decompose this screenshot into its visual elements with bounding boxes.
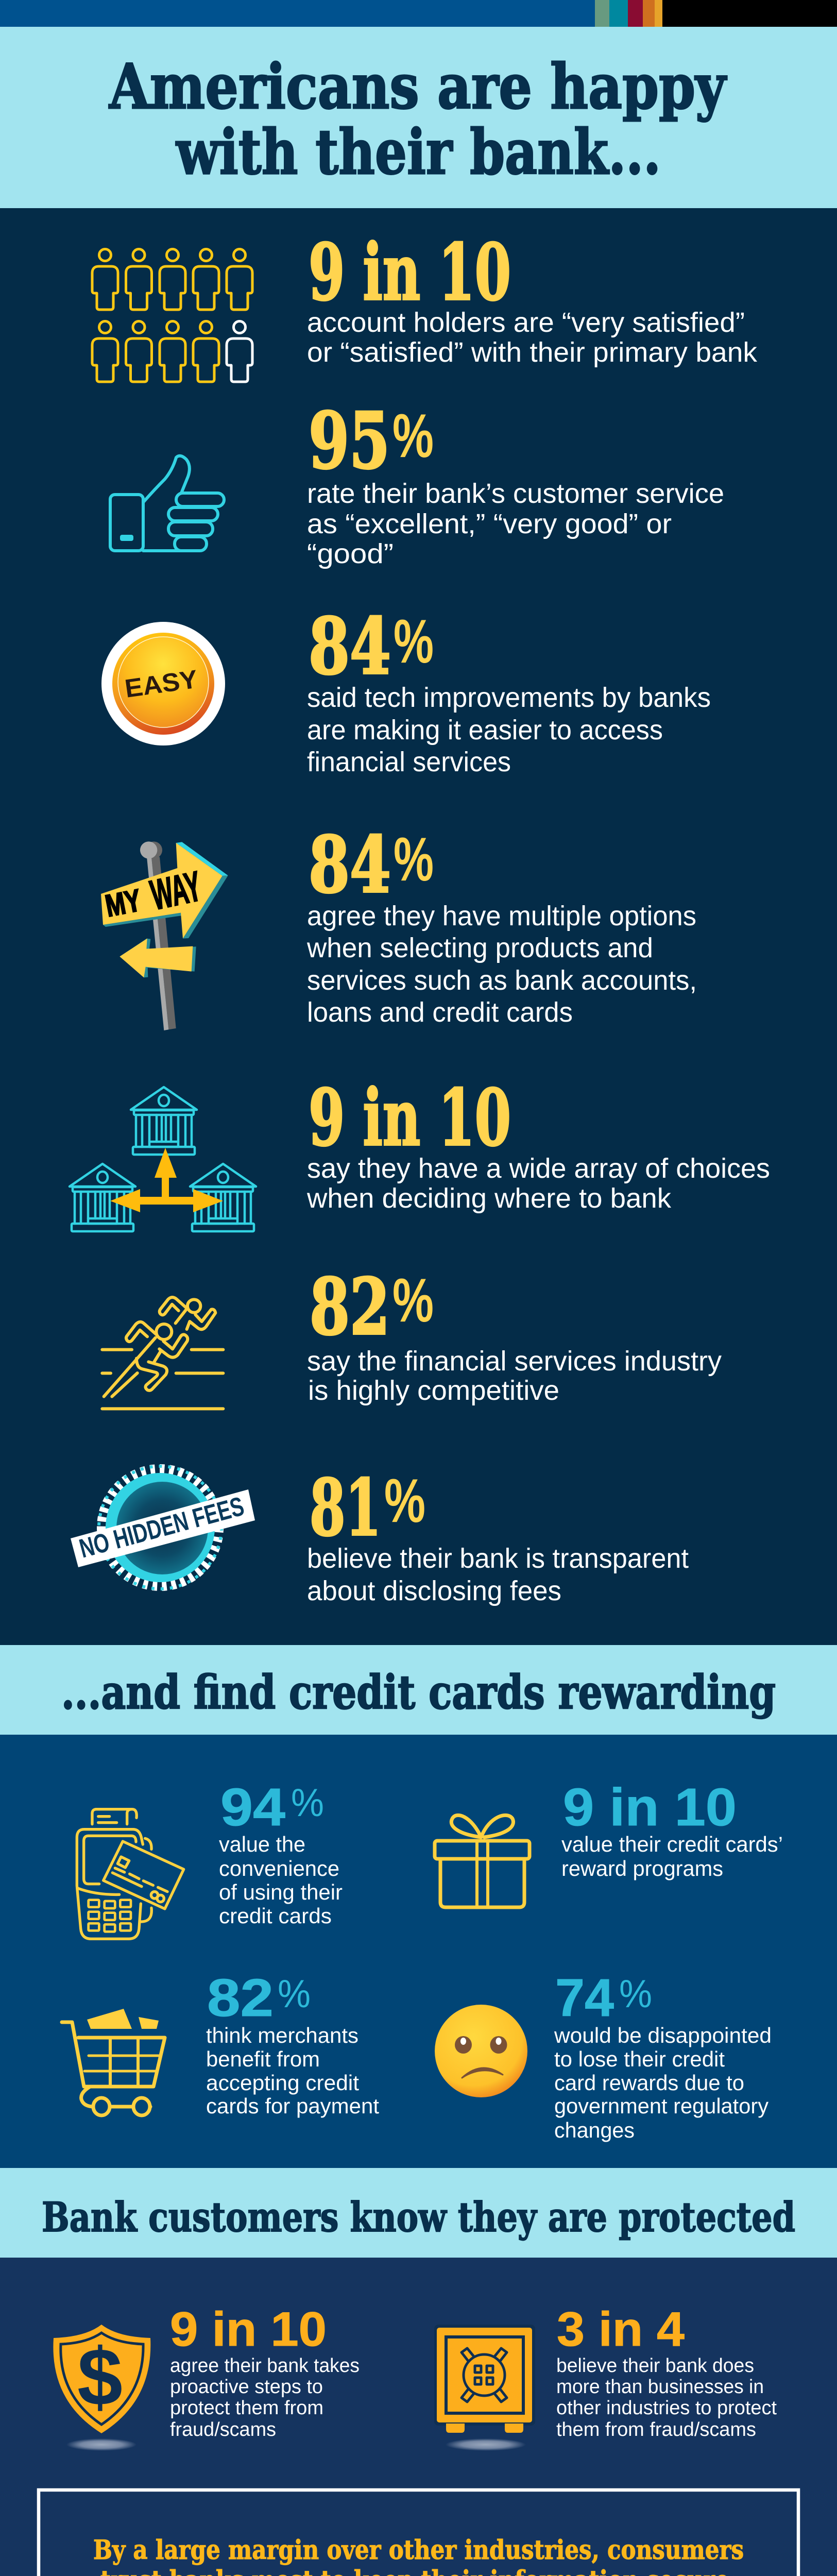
stat: 82% merchants benefit: think merchants	[206, 2023, 358, 2047]
stat: 82% merchants benefit: cards for payment	[206, 2094, 379, 2118]
stat: 74% disappointed: changes	[554, 2118, 635, 2142]
icon: three banks with arrows	[70, 1087, 256, 1231]
stat: 74% disappointed: %	[619, 1972, 652, 2016]
stat: 84% multiple options: loans and credit cards	[307, 997, 573, 1028]
stat: 82% competitive	[102, 1262, 722, 1409]
stat: 9 in 10 wide array of choices	[70, 1073, 770, 1231]
stat: 82% competitive: say the financial services industry	[307, 1346, 722, 1377]
panel: trust box	[39, 2490, 798, 2576]
stat: 9 in 10 proactive steps: protect them from	[170, 2397, 323, 2419]
stat: 84% tech improvements: are making it easier to access	[307, 715, 663, 745]
stat: 74% disappointed: to lose their credit	[554, 2047, 725, 2071]
box heading: By a large margin over other industries, consumers	[93, 2535, 744, 2566]
stat: 84% multiple options	[101, 820, 697, 1030]
icon: easy button	[101, 622, 225, 745]
stat: 74% disappointed: card rewards due to	[554, 2071, 744, 2095]
icon: no hidden fees badge: NO HIDDEN FEES	[76, 1492, 247, 1564]
stat: 9 in 10 satisfied: or “satisfied” with their primary bank	[307, 337, 758, 368]
stat: 94% convenience: %	[291, 1781, 324, 1825]
box heading	[93, 2535, 744, 2576]
panel: credit cards header	[0, 1645, 837, 1735]
stat: 3 in 4 more than other businesses: more than businesses in	[556, 2376, 764, 2398]
stat: 82% merchants benefit	[62, 1968, 379, 2118]
stat: 3 in 4 more than other businesses: them from fraud/scams	[556, 2419, 756, 2441]
title: Americans are happy	[109, 50, 727, 123]
icon: my way signpost: WAY	[147, 862, 205, 919]
icon: no hidden fees badge	[71, 1466, 255, 1589]
icon: shopping cart	[62, 2009, 165, 2115]
icon: safe	[434, 2325, 535, 2451]
stat: 3 in 4 more than other businesses: other industries to protect	[556, 2397, 777, 2419]
stat: 9 in 10 proactive steps	[53, 2302, 360, 2451]
stat: 94% convenience: value the	[219, 1832, 305, 1856]
stat: 9 in 10 wide array of choices: when deciding where to bank	[306, 1183, 672, 1214]
icon: ten people	[92, 249, 252, 382]
panel: protection header	[0, 2168, 837, 2258]
stat: 95% customer service: rate their bank’s customer service	[307, 478, 724, 509]
stat: 82% merchants benefit: benefit from	[206, 2047, 320, 2071]
stat: 84% multiple options: agree they have multiple options	[307, 901, 696, 931]
stat: 3 in 4 more than other businesses: believe their bank does	[556, 2355, 754, 2377]
stat: 95% customer service	[110, 396, 724, 569]
stat: 9 in 10 proactive steps: agree their bank takes	[170, 2355, 360, 2377]
panel: protection stats	[0, 2258, 837, 2576]
stat: 95% customer service: as “excellent,” “very good” or	[307, 509, 672, 539]
icon: runners	[102, 1297, 223, 1409]
icon: thumbs up	[110, 456, 224, 551]
stat: 81% transparent fees: believe their bank is transparent	[307, 1543, 689, 1574]
icon: gift box	[435, 1815, 529, 1907]
stat: 3 in 4 more than other businesses	[434, 2302, 777, 2451]
title	[109, 50, 727, 189]
stat: 9 in 10 reward programs: value their credit cards’	[561, 1832, 783, 1856]
stat: 84% tech improvements: 84	[309, 601, 391, 692]
panel: main header	[0, 27, 837, 208]
stat: 9 in 10 satisfied: 9 in 10	[309, 227, 511, 318]
icon: easy button: EASY	[123, 665, 199, 703]
top colour bar	[0, 0, 837, 27]
stat: 9 in 10 wide array of choices: 9 in 10	[309, 1073, 511, 1163]
icon: my way signpost: MY	[103, 883, 144, 923]
stat: 94% convenience: 94	[220, 1777, 285, 1837]
icon: sad face	[435, 2005, 527, 2097]
stat: 94% convenience: convenience	[219, 1856, 339, 1880]
stat: 9 in 10 proactive steps: 9 in 10	[170, 2302, 327, 2356]
stat: 84% tech improvements: said tech improvements by banks	[307, 682, 711, 713]
icon: card terminal	[77, 1809, 184, 1939]
panel: bank satisfaction stats	[0, 208, 837, 1645]
stat: 94% convenience: credit cards	[219, 1904, 332, 1928]
stat: 95% customer service: %	[392, 401, 434, 470]
stat: 84% multiple options: services such as bank accounts,	[307, 965, 697, 996]
icon: my way signpost	[101, 841, 228, 1030]
stat: 82% merchants benefit: 82	[207, 1968, 274, 2027]
stat: 95% customer service: “good”	[307, 538, 394, 569]
stat: 9 in 10 reward programs	[435, 1777, 783, 1907]
stat: 84% tech improvements: financial services	[307, 747, 511, 777]
stat: 74% disappointed: would be disappointed	[554, 2023, 772, 2047]
panel: credit card stats	[0, 1735, 837, 2168]
stat: 82% competitive: %	[392, 1266, 434, 1335]
stat: 9 in 10 reward programs: reward programs	[561, 1856, 723, 1880]
stat: 84% multiple options: %	[394, 825, 434, 894]
stat: 9 in 10 proactive steps: proactive steps to	[170, 2376, 323, 2398]
stat: 94% convenience: of using their	[219, 1880, 343, 1904]
stat: 82% competitive: is highly competitive	[308, 1375, 559, 1406]
title: with their bank...	[175, 116, 661, 189]
stat: 82% merchants benefit: %	[278, 1972, 311, 2016]
stat: 84% tech improvements	[101, 601, 711, 777]
stat: 9 in 10 satisfied	[92, 227, 758, 382]
stat: 95% customer service: 95	[309, 396, 390, 486]
stat: 9 in 10 proactive steps: fraud/scams	[170, 2419, 276, 2441]
icon: dollar shield: $	[77, 2332, 123, 2422]
icon: dollar shield	[53, 2325, 150, 2451]
stat: 84% multiple options: 84	[309, 820, 391, 910]
stat: 74% disappointed: 74	[555, 1968, 614, 2027]
stat: 84% tech improvements: %	[394, 607, 434, 676]
stat: 9 in 10 reward programs: 9 in 10	[563, 1777, 737, 1837]
stat: 81% transparent fees: %	[384, 1466, 425, 1535]
stat: 82% merchants benefit: accepting credit	[206, 2071, 359, 2095]
stat: 94% convenience	[77, 1777, 343, 1939]
stat: 74% disappointed	[435, 1968, 772, 2142]
stat: 81% transparent fees: 81	[310, 1463, 381, 1553]
stat: 3 in 4 more than other businesses: 3 in 4	[557, 2302, 685, 2356]
stat: 74% disappointed: government regulatory	[554, 2094, 768, 2118]
stat: 82% competitive: 82	[310, 1262, 390, 1352]
stat: 9 in 10 wide array of choices: say they have a wide array of choices	[307, 1153, 770, 1184]
stat: 84% multiple options: when selecting products and	[306, 933, 653, 963]
stat: 9 in 10 satisfied: account holders are “very satisfied”	[307, 307, 745, 338]
stat: 81% transparent fees: about disclosing fees	[307, 1575, 561, 1606]
stat: 81% transparent fees	[71, 1463, 689, 1606]
